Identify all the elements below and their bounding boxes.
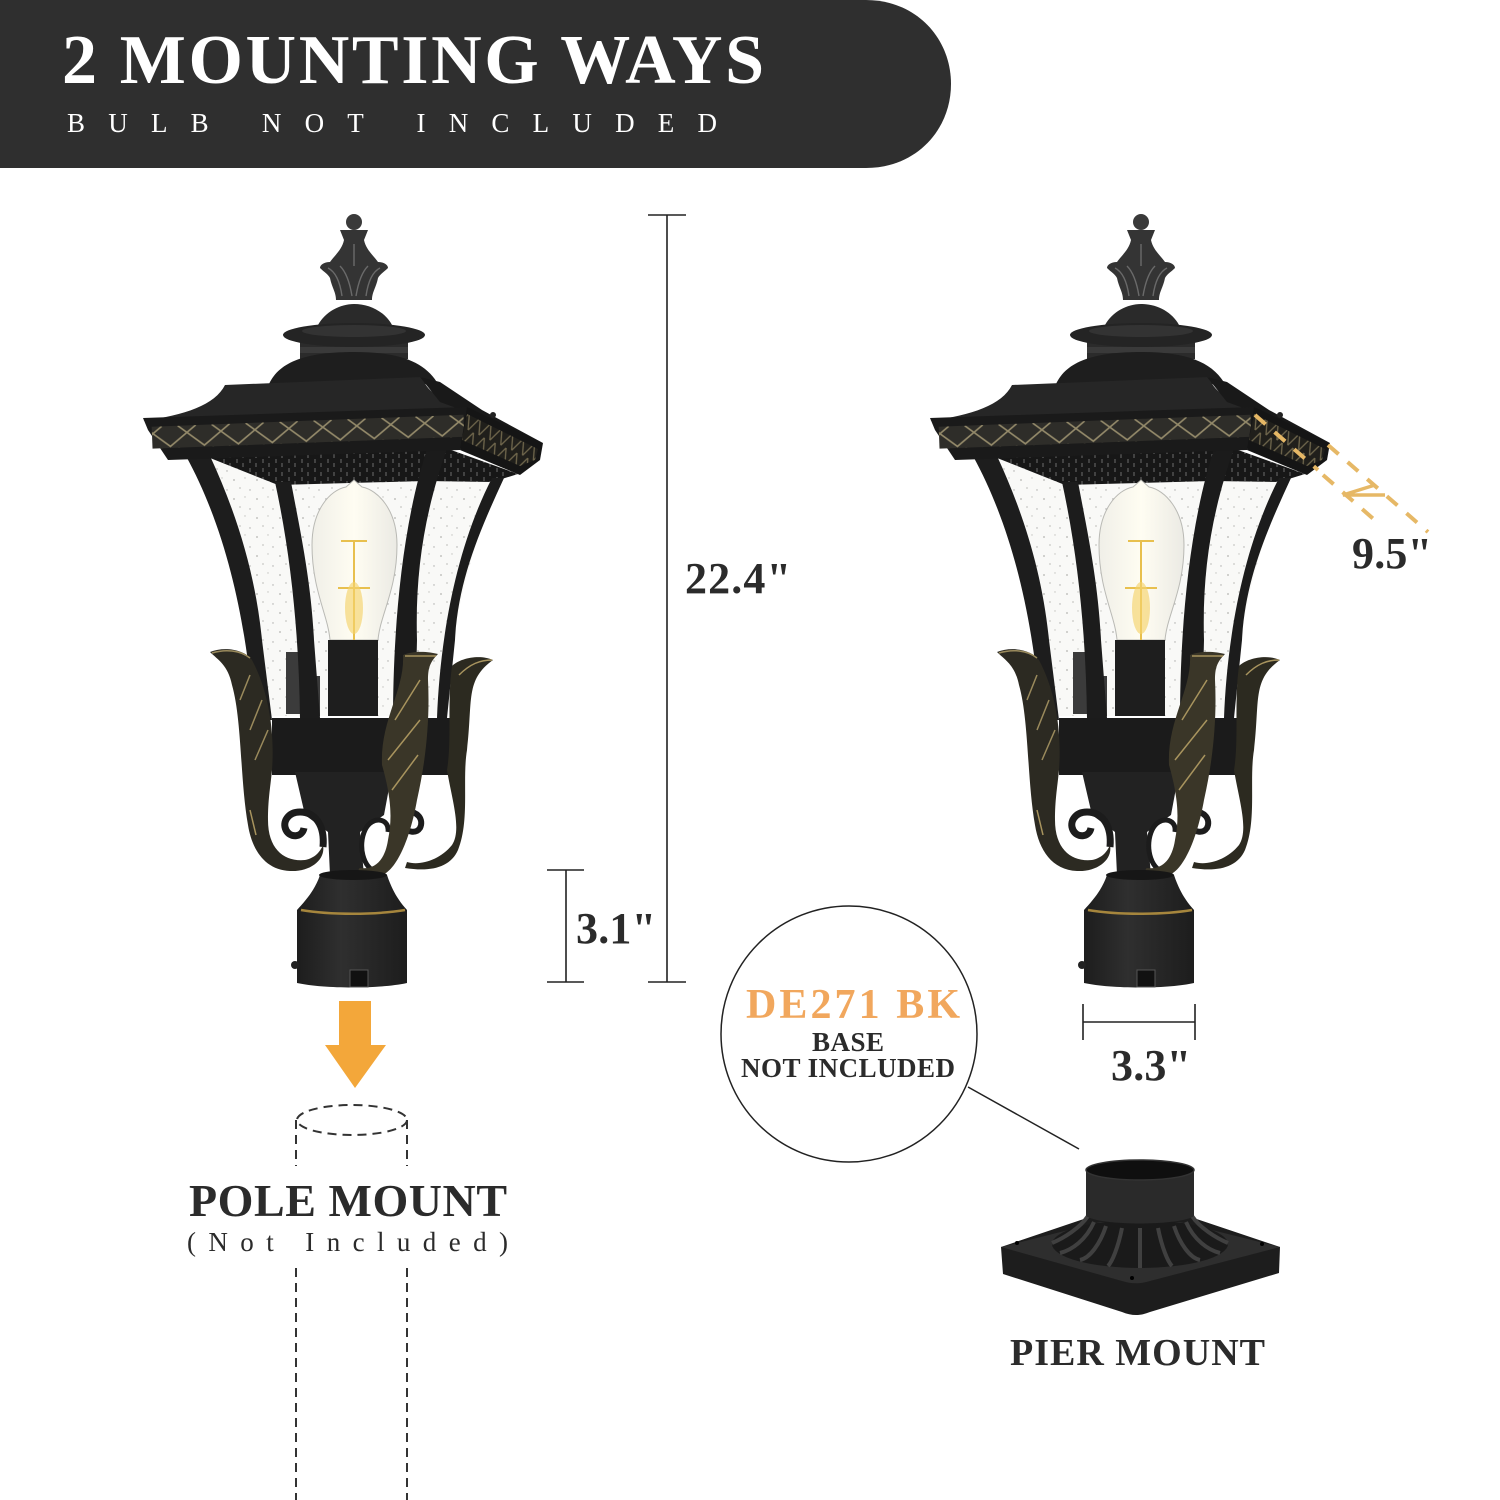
base height dimension 3.1: [547, 870, 656, 982]
lantern: pole mount view: [143, 214, 543, 988]
icon: pier mount base: [1001, 1160, 1280, 1315]
callout: base not included: NOT INCLUDED: [741, 1053, 955, 1083]
height dimension 22.4: 22.4": [685, 554, 791, 603]
pole: dashed outline: [296, 1105, 407, 1500]
height dimension 22.4: [648, 215, 791, 982]
width dimension 3.3: 3.3": [1111, 1041, 1191, 1090]
depth dimension 9.5: 9.5": [1352, 529, 1432, 578]
base height dimension 3.1: 3.1": [576, 904, 656, 953]
pole mount label: [187, 1175, 508, 1257]
pole mount label: (Not Included): [187, 1227, 508, 1257]
callout: base not included: DE271 BK: [746, 982, 960, 1028]
pier mount label: PIER MOUNT: [1010, 1332, 1265, 1374]
pole mount label: POLE MOUNT: [189, 1175, 507, 1226]
title: 2 MOUNTING WAYS: [62, 22, 764, 99]
lantern: pier mount view: [930, 214, 1330, 988]
header banner: [0, 0, 951, 168]
callout: base not included: [721, 906, 1079, 1162]
arrow: down to pole: [325, 1001, 386, 1088]
depth dimension 9.5: [1255, 415, 1432, 578]
width dimension 3.3: [1083, 1004, 1195, 1090]
callout: base not included: BASE: [812, 1027, 884, 1057]
subtitle: BULB NOT INCLUDED: [67, 108, 717, 138]
